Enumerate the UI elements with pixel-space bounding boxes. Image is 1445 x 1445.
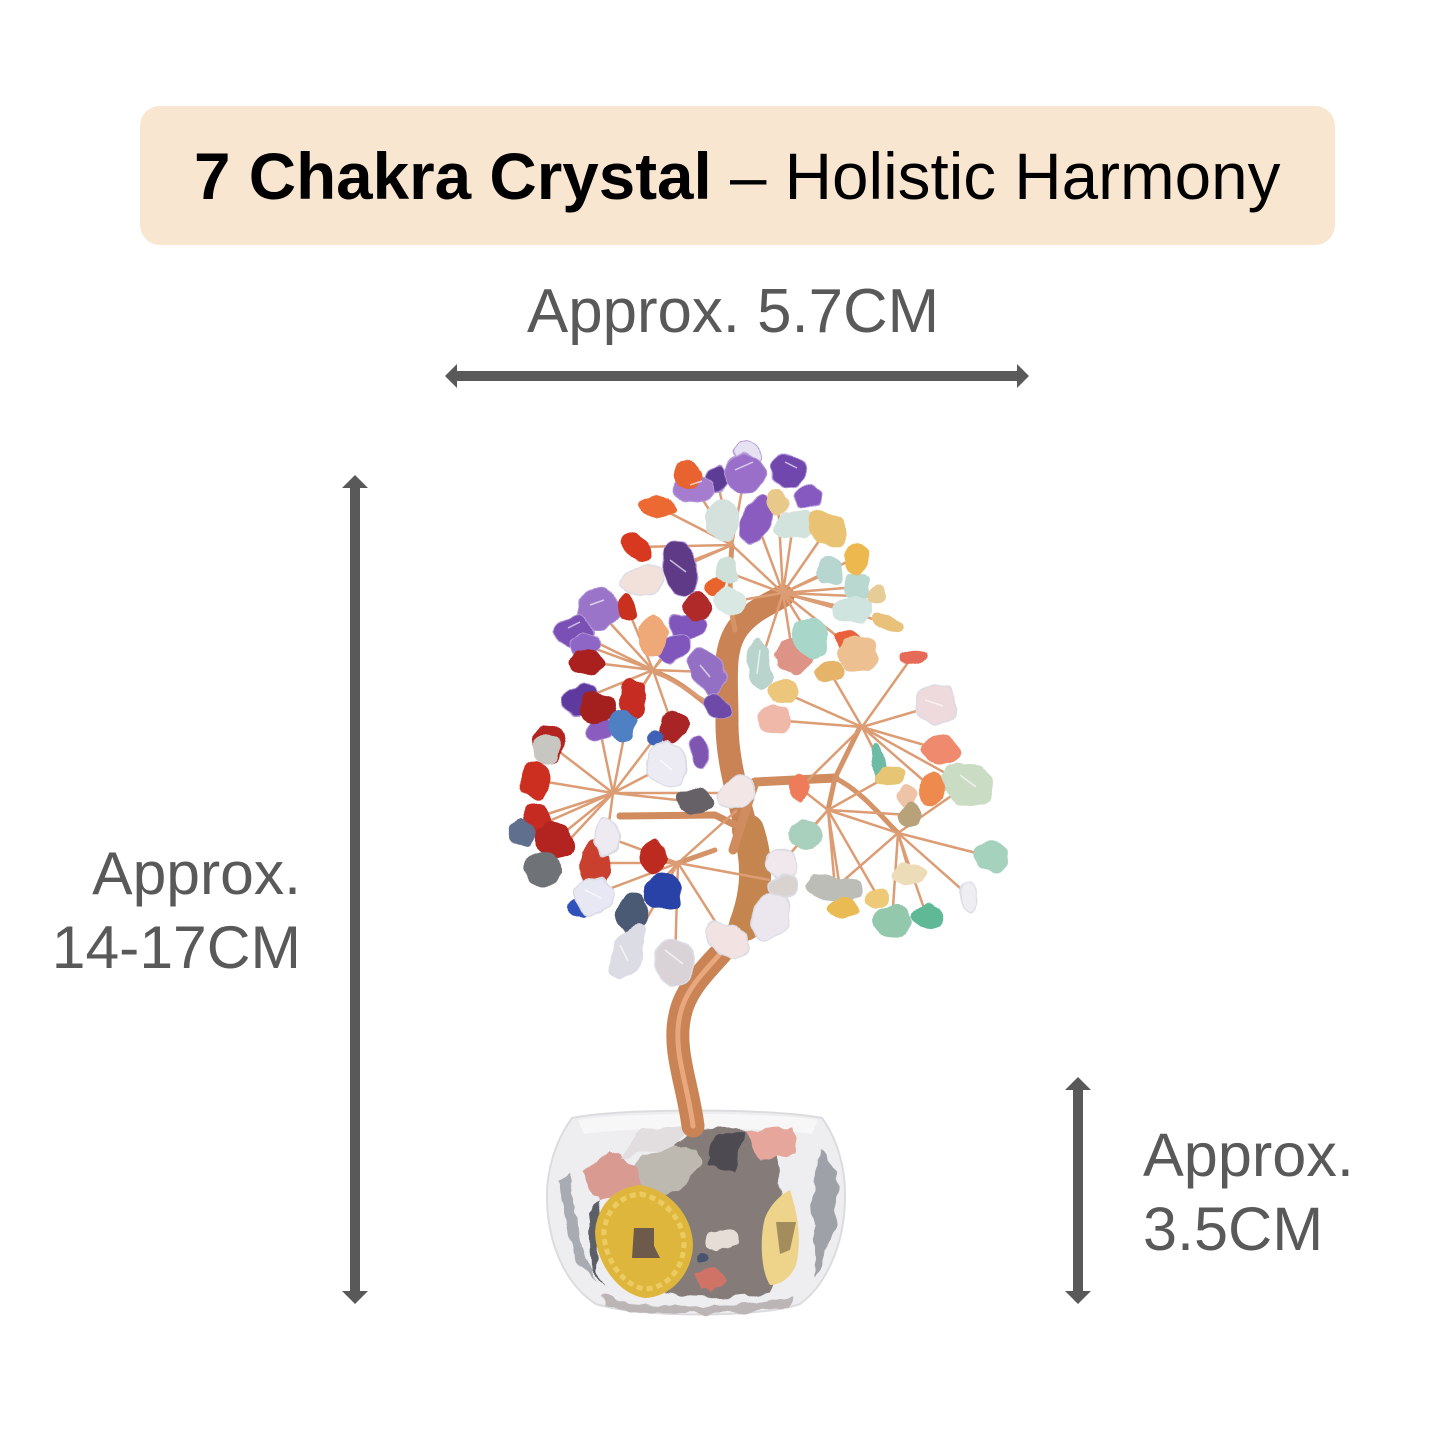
glass pot xyxy=(547,1110,845,1314)
crystals: citrine and coral xyxy=(757,489,965,917)
height label: 14-17CM xyxy=(52,913,301,981)
wire trunk xyxy=(620,545,898,1126)
arrow: total height xyxy=(342,475,368,1304)
arrow: base height xyxy=(1065,1077,1091,1304)
branch wires xyxy=(522,473,992,962)
crystals: red and carnelian xyxy=(520,461,724,886)
base height label: Approx. xyxy=(1143,1121,1354,1189)
crystals: clear quartz xyxy=(574,559,981,986)
title banner xyxy=(140,106,1335,245)
coin: front xyxy=(595,1185,693,1298)
height label: Approx. xyxy=(92,839,301,907)
coin: side xyxy=(762,1190,799,1285)
crystals: aquamarine and aventurine xyxy=(705,500,1009,938)
base height label xyxy=(1143,1121,1354,1263)
crystals: lapis and grey xyxy=(508,710,713,938)
width label: Approx. 5.7CM xyxy=(527,277,939,346)
crystal tree xyxy=(508,442,1009,1314)
height label xyxy=(52,839,301,981)
base height label: 3.5CM xyxy=(1143,1195,1323,1263)
crystals: amethyst xyxy=(556,442,824,773)
arrow: width xyxy=(445,364,1029,388)
title: 7 Chakra Crystal – Holistic Harmony xyxy=(194,140,1280,213)
crystal highlights xyxy=(568,462,976,964)
